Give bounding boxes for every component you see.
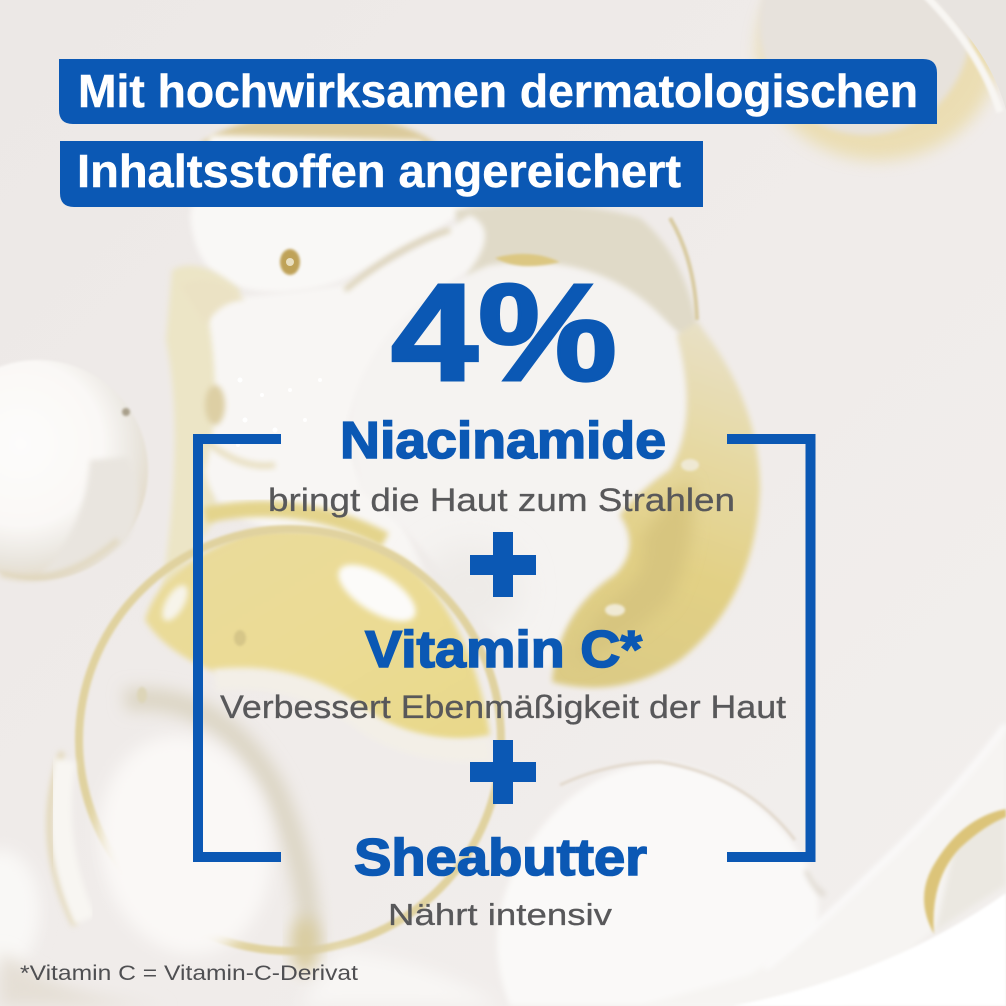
soft bottom left highlights (0, 850, 500, 1006)
glass dome above the centre (455, 204, 700, 345)
title (59, 59, 937, 207)
foamy white patch (180, 215, 485, 600)
footnote: *Vitamin C = Vitamin-C-Derivat (20, 962, 358, 985)
ingredient: Sheabutter: Nährt intensiv (388, 897, 613, 932)
ingredient: Vitamin C: Verbessert Ebenmäßigkeit der Haut (220, 689, 786, 725)
large white bubble in centre (347, 254, 687, 668)
left white sphere (0, 360, 148, 580)
top right bubble (758, 0, 1006, 160)
top glass bubble behind the headline (182, 113, 470, 292)
ingredient: Niacinamide: Niacinamide (340, 412, 666, 470)
ingredient: Sheabutter (354, 829, 647, 932)
ingredient: Niacinamide: bringt die Haut zum Strahlen (268, 482, 735, 518)
bottom right white bubble (497, 762, 825, 1006)
right bracket (727, 439, 810, 857)
golden crescent on the right of the centre bubble (552, 218, 760, 688)
dish rim and white corner at bottom right (640, 725, 1006, 1006)
headline line 1: Mit hochwirksamen dermatologischen (78, 65, 918, 117)
ingredient: Vitamin C: Vitamin C* (365, 621, 643, 679)
left bracket (198, 439, 281, 857)
plus icon 1 (470, 532, 536, 597)
golden glass column on the left (160, 266, 240, 600)
ingredient: Sheabutter: Sheabutter (354, 829, 647, 887)
golden lens inside the ring (145, 530, 490, 751)
big percentage: 4% (391, 256, 617, 410)
ingredient: Niacinamide (268, 412, 735, 518)
lower left glass ring (50, 529, 501, 973)
headline line 2: Inhaltsstoffen angereichert (77, 145, 681, 197)
right edge golden sliver (924, 809, 1006, 934)
plus icon 2 (470, 740, 536, 804)
ingredient: Vitamin C (220, 621, 786, 725)
